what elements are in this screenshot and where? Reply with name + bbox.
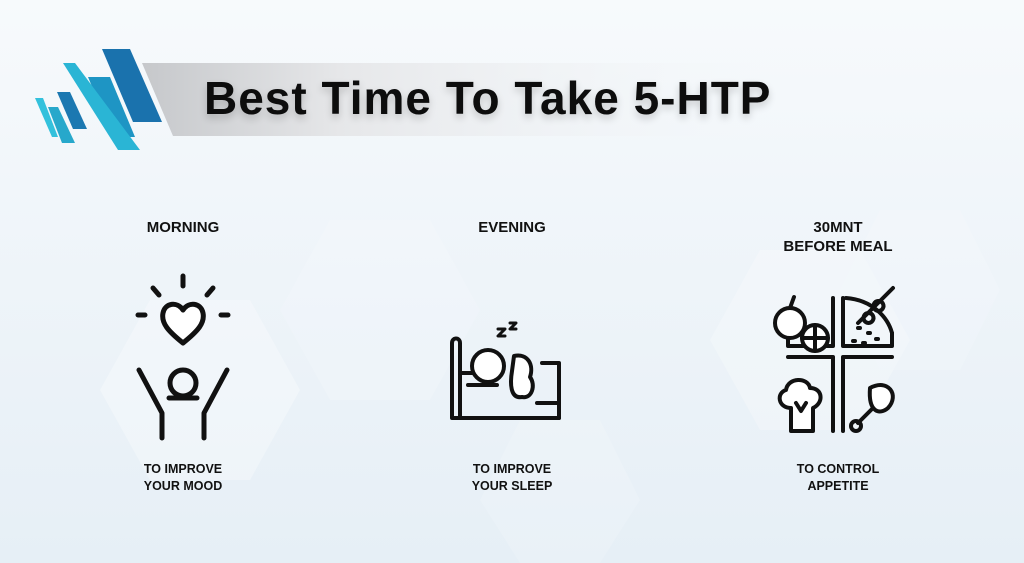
caption: TO CONTROL xyxy=(797,462,879,476)
heading: MORNING xyxy=(147,219,219,236)
caption: APPETITE xyxy=(807,479,869,493)
heading: 30MNT xyxy=(813,219,863,236)
caption: YOUR MOOD xyxy=(144,479,222,493)
grey band xyxy=(142,63,492,136)
icon: food quadrants xyxy=(773,286,896,433)
heading: BEFORE MEAL xyxy=(783,238,893,255)
heading: EVENING xyxy=(478,219,546,236)
caption: TO IMPROVE xyxy=(473,462,551,476)
column: morning xyxy=(136,219,778,493)
caption: TO IMPROVE xyxy=(144,462,222,476)
header banner xyxy=(35,49,772,150)
heading xyxy=(783,219,893,255)
caption xyxy=(144,462,222,493)
logo: blue bars xyxy=(35,49,162,150)
column: evening xyxy=(450,219,561,493)
caption: YOUR SLEEP xyxy=(472,479,552,493)
caption xyxy=(796,462,879,493)
caption xyxy=(472,462,552,493)
icon: heart person xyxy=(136,274,535,440)
icon: sleeping in bed xyxy=(450,322,561,420)
column: before meal xyxy=(773,219,896,493)
title: Best Time To Take 5-HTP xyxy=(204,72,771,124)
